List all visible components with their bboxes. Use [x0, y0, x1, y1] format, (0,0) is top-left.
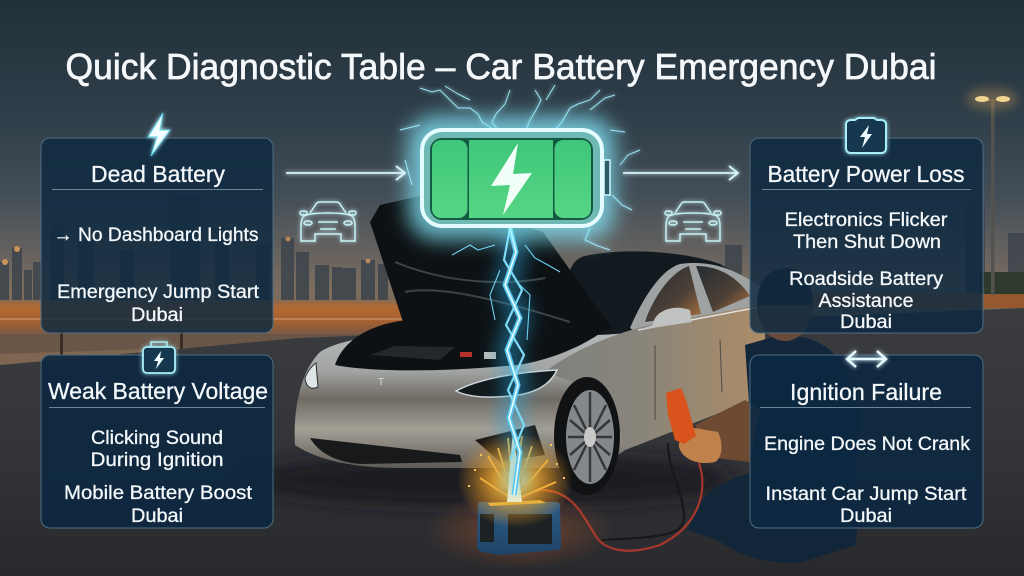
lightning arcs above battery	[400, 85, 640, 250]
car side frame	[630, 263, 765, 335]
background: trees and barrier on the right	[740, 272, 1024, 308]
remedy: ignition failure	[766, 483, 967, 527]
lightning bolt from battery to jump box	[452, 228, 560, 495]
car shadow	[245, 454, 735, 506]
battery terminal	[604, 160, 610, 195]
panel: battery power loss	[750, 118, 983, 333]
arrow: battery to right panel	[623, 166, 738, 180]
remedy: weak battery voltage	[64, 482, 253, 527]
heading: weak battery voltage: Weak Battery Voltage	[48, 378, 268, 404]
heading: ignition failure: Ignition Failure	[790, 379, 942, 405]
background: orange barrier on the left	[0, 300, 420, 356]
remedy: battery power loss: Roadside Battery	[789, 268, 943, 290]
remedy: battery power loss: Assistance	[818, 290, 914, 312]
portable jump starter box	[425, 490, 615, 570]
arrow: left panel to battery	[286, 166, 405, 180]
car body	[295, 330, 765, 468]
car side windows	[645, 266, 750, 322]
heading: battery power loss: Battery Power Loss	[768, 161, 964, 187]
mechanic legs	[688, 470, 860, 563]
heading: dead battery: Dead Battery	[91, 161, 225, 187]
symptom: battery power loss: Then Shut Down	[793, 231, 941, 253]
icon: double arrow	[847, 351, 886, 367]
symptom: dead battery: → No Dashboard Lights	[54, 224, 259, 246]
remedy: dead battery: Emergency Jump Start	[57, 281, 260, 303]
car open hood	[370, 196, 613, 330]
icon: battery	[143, 342, 175, 373]
remedy: ignition failure: Instant Car Jump Start	[766, 483, 967, 505]
car engine bay	[335, 320, 610, 370]
orange clamp	[666, 388, 696, 444]
battery glow	[408, 116, 615, 240]
remedy: dead battery: Dubai	[131, 304, 183, 326]
car logo: T	[378, 377, 384, 388]
panel: ignition failure	[750, 351, 983, 528]
icon: car left	[300, 202, 356, 241]
remedy: battery power loss: Dubai	[840, 311, 892, 333]
car headlights	[305, 363, 557, 397]
mechanic torso	[745, 335, 860, 490]
background: skyline	[0, 195, 1024, 300]
title: Quick Diagnostic Table – Car Battery Emergency Dubai	[66, 46, 936, 87]
icon: car right	[665, 202, 721, 241]
car mirror	[638, 308, 692, 330]
panel: weak battery voltage	[41, 342, 273, 528]
icon: lightning bolt	[148, 113, 170, 156]
symptom: weak battery voltage	[90, 427, 224, 471]
symptom: weak battery voltage: Clicking Sound	[91, 427, 223, 449]
symptom: battery power loss	[784, 209, 948, 253]
car wheel	[554, 377, 620, 495]
sparks	[457, 430, 573, 528]
symptom: ignition failure: Engine Does Not Crank	[764, 433, 970, 455]
symptom: battery power loss: Electronics Flicker	[784, 209, 948, 231]
remedy: weak battery voltage: Mobile Battery Boost	[64, 482, 253, 504]
jumper cables	[520, 443, 702, 551]
remedy: battery power loss	[789, 268, 943, 333]
remedy: weak battery voltage: Dubai	[131, 505, 183, 527]
battery casing	[422, 130, 602, 226]
battery bolt	[491, 143, 532, 215]
mechanic kneeling with clamp	[520, 268, 860, 563]
car grille	[310, 425, 545, 464]
central battery icon	[408, 116, 615, 240]
car door panel	[545, 304, 765, 450]
car roof and windshield	[555, 251, 765, 370]
panel: dead battery	[41, 113, 273, 333]
remedy: ignition failure: Dubai	[840, 505, 892, 527]
mechanic head	[757, 268, 813, 341]
icon: battery	[846, 118, 886, 153]
symptom: weak battery voltage: During Ignition	[90, 449, 224, 471]
mechanic arm and hand	[679, 400, 760, 463]
remedy: dead battery	[57, 281, 260, 326]
battery cells	[430, 138, 593, 220]
background: road	[0, 308, 1024, 576]
car with open hood	[245, 196, 765, 506]
background: street lamp	[966, 88, 1018, 295]
